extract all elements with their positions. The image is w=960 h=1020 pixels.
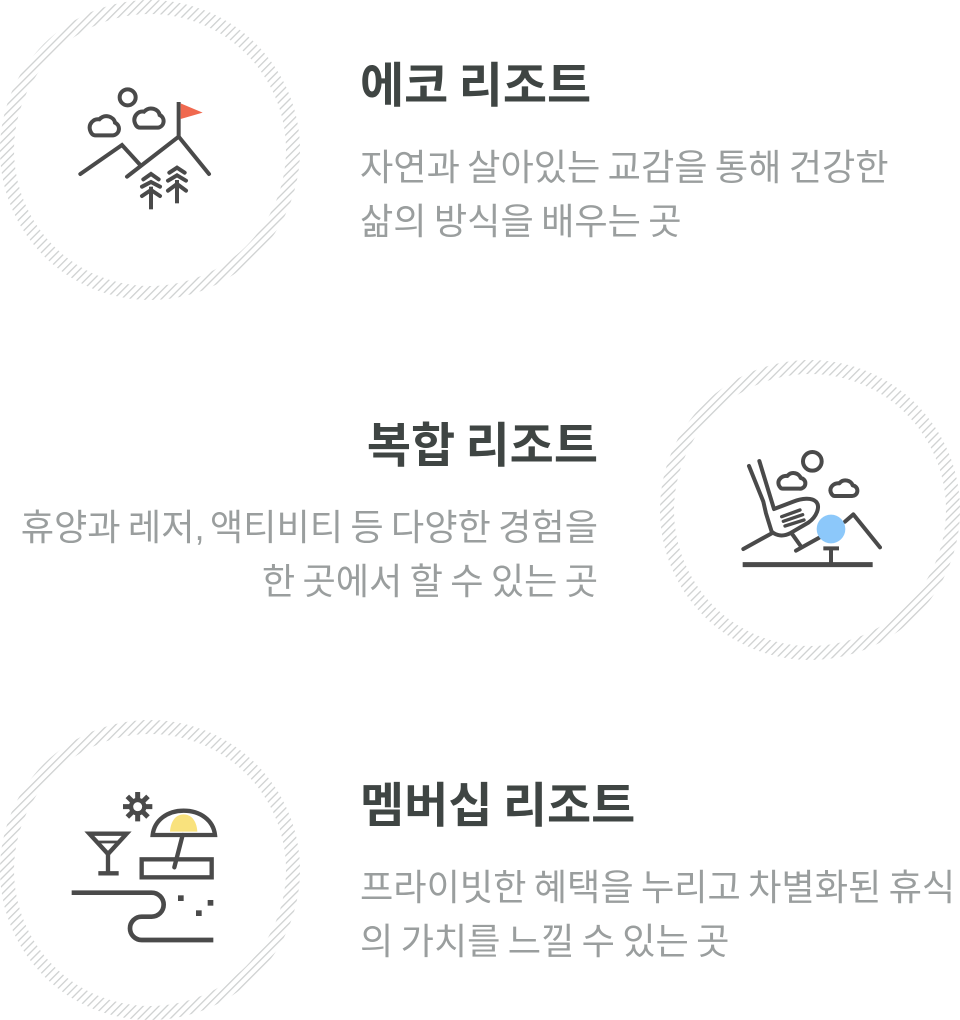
ring: membership resort	[0, 720, 300, 1020]
ring: complex resort	[660, 360, 960, 660]
heading: eco resort: 에코 리조트	[360, 60, 591, 113]
text: complex resort description: 한 곳에서 할 수 있는 곳	[262, 561, 598, 602]
heading: complex resort: 복합 리조트	[367, 420, 598, 473]
text: eco resort description: 자연과 살아있는 교감을 통해 건강한	[360, 147, 889, 188]
icon: mountain with flag	[80, 89, 209, 209]
text: membership resort description: 의 가치를 느낄 수 있는 곳	[360, 921, 729, 962]
text: complex resort description	[21, 507, 598, 602]
heading: membership resort: 멤버십 리조트	[360, 780, 635, 833]
text: membership resort description: 프라이빗한 혜택을 누리고 차별화된 휴식	[360, 867, 955, 908]
ring: eco resort	[0, 0, 300, 300]
text: eco resort description	[360, 147, 889, 242]
icon: golf club and ball	[743, 452, 880, 565]
text: complex resort description: 휴양과 레저, 액티비티 등 다양한 경험을	[21, 507, 598, 548]
icon: beach umbrella and cocktail	[72, 792, 215, 940]
text: membership resort description	[360, 867, 955, 962]
text: eco resort description: 삶의 방식을 배우는 곳	[360, 201, 682, 242]
